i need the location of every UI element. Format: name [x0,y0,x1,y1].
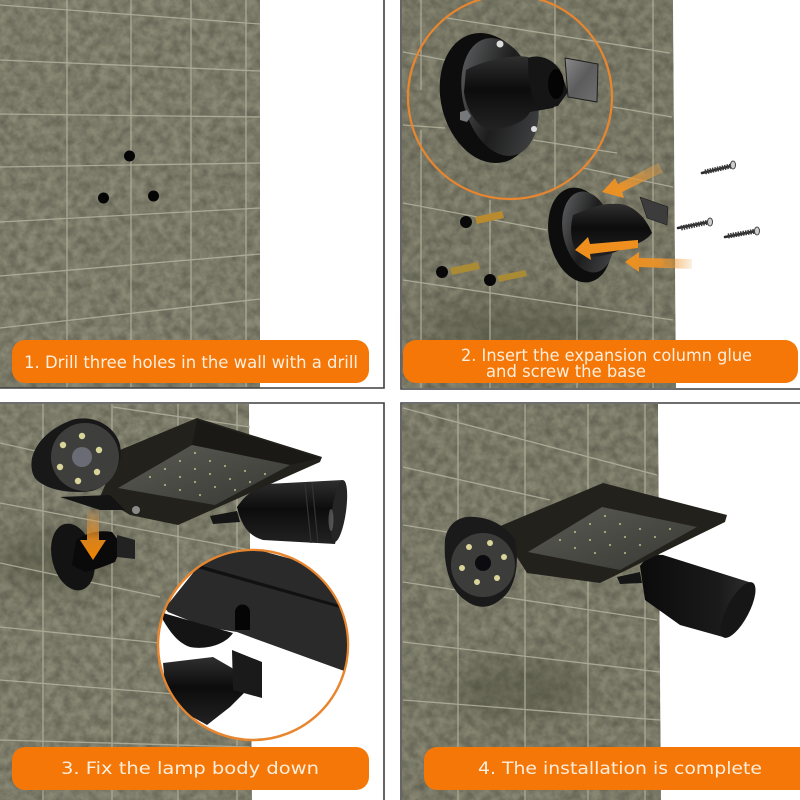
frame [0,0,384,388]
second lamp head [210,479,350,544]
down arrow [80,510,106,560]
solar panel [498,483,727,583]
caption 2: and screw the base [486,362,646,382]
wall with tile grid [402,0,676,388]
frame [401,403,800,800]
inset circle detail [158,545,350,740]
small mount [540,182,668,288]
expansion column holes [436,211,527,286]
front lamp with LEDs [31,418,121,492]
caption 4 [424,747,800,790]
caption 3 [12,747,369,790]
wall with tile grid [402,404,661,800]
front lamp with LEDs [445,517,517,607]
wall with tile grid [0,0,260,388]
second lamp head [617,555,762,643]
caption 2 [403,340,798,383]
caption 1 [12,340,369,383]
orange arrows [575,163,692,272]
three drilled holes [98,150,159,204]
large mount base [440,33,598,163]
panel 2: insert expansion columns and screw base [401,0,800,389]
wall with tile grid [0,404,252,800]
caption 1: 1. Drill three holes in the wall with a drill [24,353,358,373]
wall mount with bracket [44,519,135,595]
caption 2: 2. Insert the expansion column glue [461,346,752,366]
caption 3: 3. Fix the lamp body down [61,759,319,779]
panel 3: fix the lamp body down [0,403,384,800]
frame [401,0,800,389]
panel 1: drill holes [0,0,384,388]
screws [678,161,760,237]
frame [0,403,384,800]
caption 4: 4. The installation is complete [478,759,762,779]
solar panel [60,418,322,525]
zoom circle of the base [408,0,612,199]
panel 4: installation complete [401,403,800,800]
